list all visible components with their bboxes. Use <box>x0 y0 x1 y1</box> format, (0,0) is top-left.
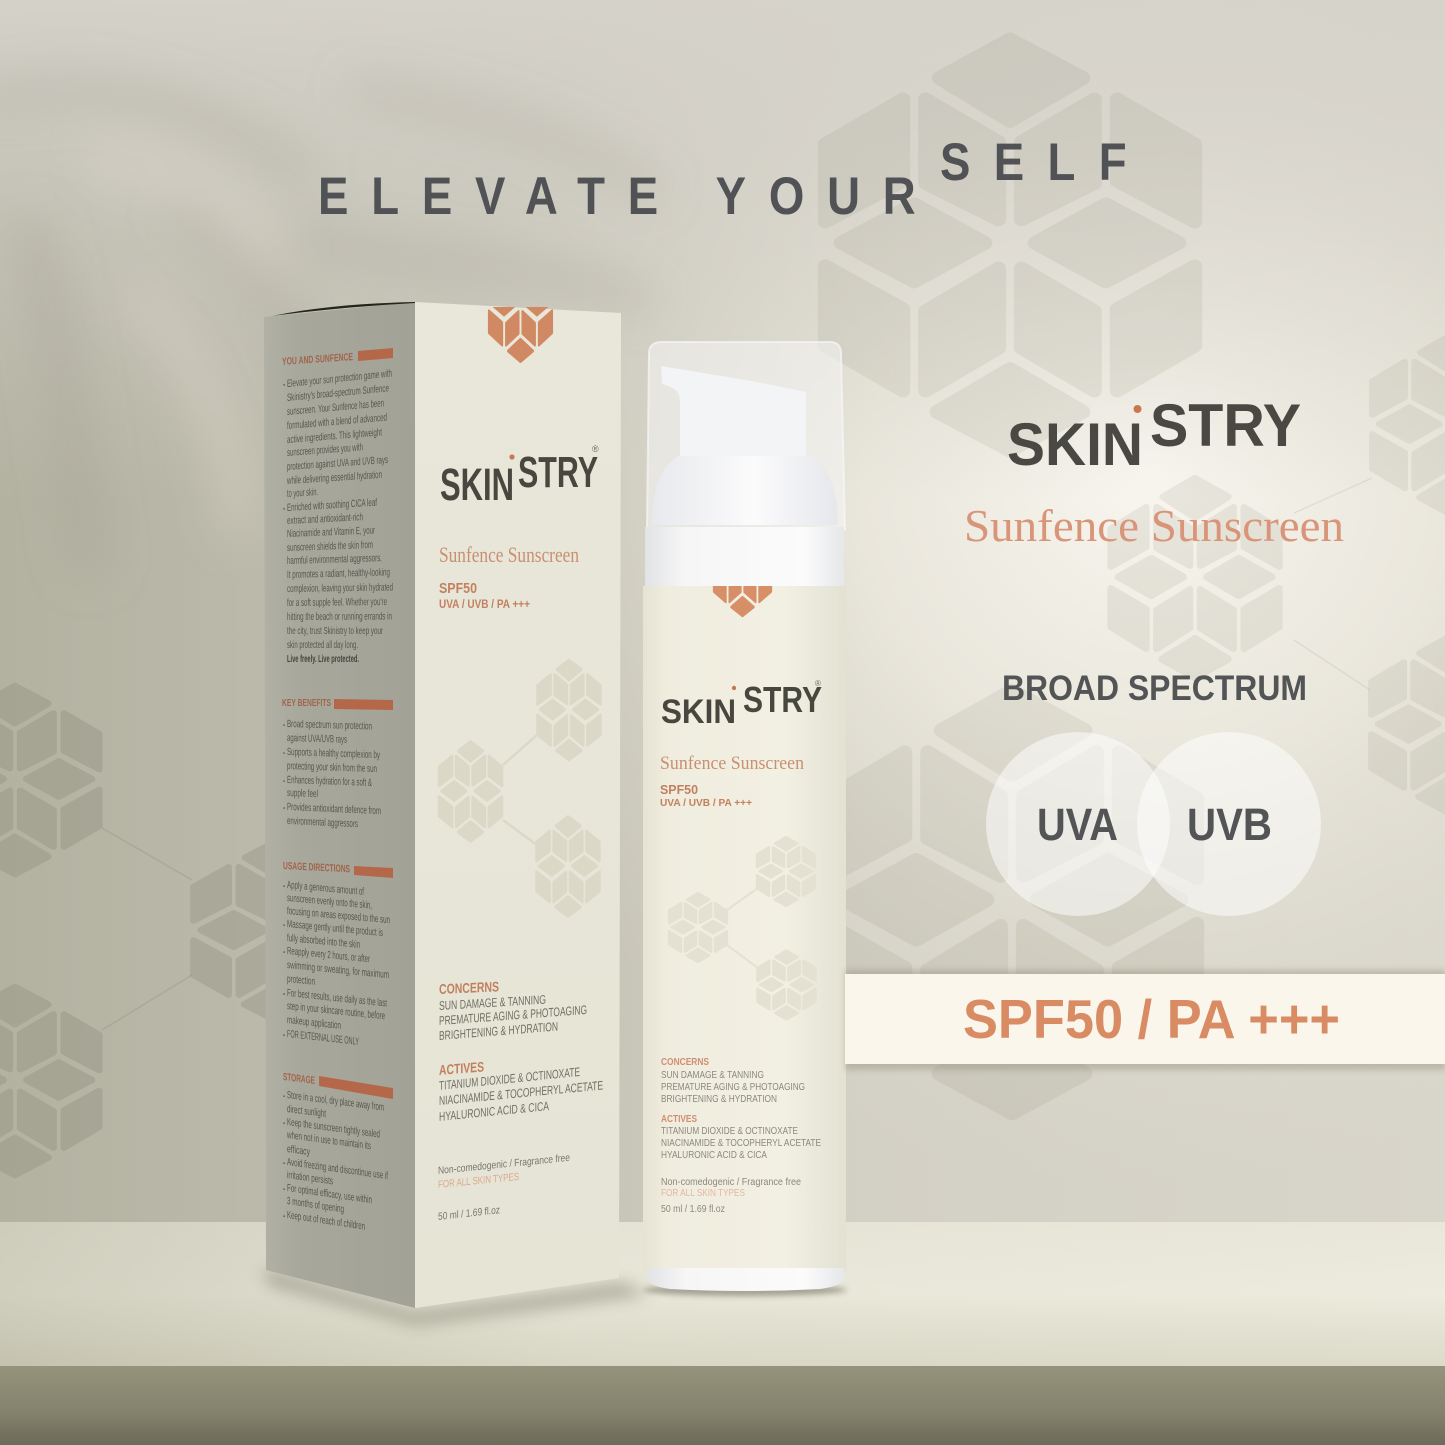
front ledge <box>0 1366 1445 1445</box>
side text: key benefits: Enhances hydration for a soft & <box>287 774 372 789</box>
side text: you and sunfence: for a soft supple feel. Whether you're <box>287 596 387 609</box>
side text: storage: Keep out of reach of children <box>287 1209 365 1233</box>
bottle product name: Sunfence Sunscreen <box>660 753 804 774</box>
circle: UVA: UVA <box>1037 799 1118 850</box>
carton logo: SKIN <box>440 459 514 510</box>
bottle actives text: HYALURONIC ACID & CICA <box>661 1149 767 1161</box>
side text: key benefits: protecting your skin from the sun <box>287 760 377 775</box>
side heading: key benefits <box>282 697 393 710</box>
bottle honeycomb graphic <box>669 837 816 1020</box>
side text: you and sunfence: hitting the beach or running errands in <box>287 610 392 623</box>
bottle actives text: ACTIVES <box>661 1113 697 1125</box>
side text: you and sunfence: sunscreen shields the skin from <box>287 539 373 554</box>
carton product name: Sunfence Sunscreen <box>439 542 579 567</box>
brand logo <box>1007 392 1301 478</box>
circle: UVA <box>986 732 1170 916</box>
carton spf: UVA / UVB / PA +++ <box>439 597 530 611</box>
side text: key benefits: • <box>283 779 285 785</box>
bottle concerns text: BRIGHTENING & HYDRATION <box>661 1093 777 1105</box>
carton spf <box>439 580 530 611</box>
carton concerns text: BRIGHTENING & HYDRATION <box>439 1019 558 1043</box>
side text: usage directions: makeup application <box>287 1014 341 1032</box>
bottle concerns text: PREMATURE AGING & PHOTOAGING <box>661 1081 805 1093</box>
carton skin type note: Non-comedogenic / Fragrance free <box>438 1152 570 1177</box>
carton shadow <box>262 1268 650 1325</box>
bottle logo: STRY <box>743 679 822 720</box>
bottle spf <box>660 782 752 809</box>
side text: you and sunfence: extract and antioxidant-rich <box>287 511 363 527</box>
side text: storage: • <box>283 1187 285 1193</box>
brand logo: SKIN <box>1007 411 1143 478</box>
side text: you and sunfence: to your skin. <box>287 486 318 500</box>
SPF band shadow <box>845 970 1445 1070</box>
carton concerns text <box>439 978 587 1043</box>
side text: you and sunfence: formulated with a blend of advanced <box>287 412 387 432</box>
side text: you and sunfence: Enriched with soothing CICA leaf <box>287 497 377 514</box>
side text: storage: Store in a cool, dry place away from <box>287 1089 384 1114</box>
carton actives text: TITANIUM DIOXIDE & OCTINOXATE <box>439 1065 580 1093</box>
carton front face <box>415 302 621 1308</box>
bottle skin type note <box>661 1177 801 1215</box>
pump nozzle <box>661 366 806 456</box>
side text: storage: 3 months of opening <box>287 1195 344 1216</box>
side text: usage directions <box>283 879 390 1048</box>
bottle actives text: NIACINAMIDE & TOCOPHERYL ACETATE <box>661 1137 821 1149</box>
carton logo: ® <box>592 444 599 454</box>
SPF band: SPF50 / PA +++ <box>963 988 1340 1050</box>
bottle shadow <box>643 1284 847 1296</box>
side text: key benefits: environmental aggressors <box>287 815 358 830</box>
side text: key benefits <box>283 718 381 830</box>
carton actives text: HYALURONIC ACID & CICA <box>439 1099 549 1124</box>
side text: storage: when not in use to maintain its <box>286 1129 371 1152</box>
side text: you and sunfence: the city, trust Skinistry to keep your <box>287 625 383 637</box>
circle: UVB: UVB <box>1187 799 1272 850</box>
side text: usage directions: For best results, use daily as the last <box>287 987 387 1009</box>
side text: you and sunfence: Niacinamide and Vitamin E, your <box>287 524 375 540</box>
side text: usage directions: swimming or sweating, for maximum <box>287 959 389 981</box>
side text: storage: • <box>283 1121 285 1127</box>
side text: storage: • <box>283 1214 285 1220</box>
side text: you and sunfence: harmful environmental aggressors. <box>287 552 382 567</box>
bottle base <box>647 1268 844 1291</box>
side text: usage directions: protection <box>287 973 315 988</box>
transparent cap <box>647 342 845 530</box>
background honeycomb pattern <box>0 40 1445 1175</box>
side text: storage: For optimal efficacy, use within <box>287 1182 372 1206</box>
side text: you and sunfence: • <box>283 507 285 513</box>
bottle spf: SPF50 <box>660 782 698 797</box>
side text: you and sunfence: skin protected all day long. <box>287 639 358 651</box>
side text: you and sunfence: protection against UVA and UVB rays <box>287 454 388 473</box>
UVA UVB venn diagram <box>986 732 1321 916</box>
bottle logo: ® <box>815 679 821 688</box>
side text: you and sunfence <box>283 368 393 665</box>
side text: usage directions: fully absorbed into the skin <box>287 932 360 951</box>
side text: usage directions: FOR EXTERNAL USE ONLY <box>287 1028 359 1048</box>
side text: you and sunfence: sunscreen. Your Sunfence has been <box>287 397 384 418</box>
bottle skin type note: 50 ml / 1.69 fl.oz <box>661 1204 725 1215</box>
side text: you and sunfence: It promotes a radiant, healthy-looking <box>287 566 390 581</box>
headline: ELEVATE YOUR SELF <box>318 133 1127 226</box>
side text: key benefits: • <box>283 806 285 812</box>
carton actives text: NIACINAMIDE & TOCOPHERYL ACETATE <box>439 1078 603 1108</box>
side heading: storage <box>283 1071 393 1099</box>
icon: carton orange honeycomb logo <box>488 307 554 363</box>
side text: storage: • <box>283 1161 285 1167</box>
carton concerns text: SUN DAMAGE & TANNING <box>439 993 546 1013</box>
headline: ELEVATE YOUR SELF: SELF <box>940 133 1127 192</box>
side text: storage <box>283 1089 388 1233</box>
SPF band <box>845 974 1445 1064</box>
collar <box>645 527 844 589</box>
icon: bottle orange honeycomb logo <box>712 586 772 618</box>
side text: you and sunfence: • <box>283 383 285 389</box>
bottle spf: UVA / UVB / PA +++ <box>660 798 752 809</box>
side text: you and sunfence: active ingredients. This lightweight <box>287 426 382 446</box>
side text: you and sunfence: sunscreen provides you with <box>287 441 363 459</box>
bottle concerns text <box>661 1056 805 1105</box>
side text: storage: irritation persists <box>287 1169 333 1187</box>
side text: key benefits: Broad spectrum sun protection <box>287 718 372 733</box>
carton actives text: ACTIVES <box>439 1058 484 1078</box>
floor surface <box>0 1222 1445 1366</box>
carton skin type note: FOR ALL SKIN TYPES <box>438 1171 519 1191</box>
carton concerns text: PREMATURE AGING & PHOTOAGING <box>439 1003 587 1028</box>
side text: you and sunfence: Elevate your sun protection game with <box>287 368 392 390</box>
side text: usage directions: • <box>283 923 285 929</box>
side text: you and sunfence: complexion, leaving your skin hydrated <box>287 581 393 595</box>
bottle actives text: TITANIUM DIOXIDE & OCTINOXATE <box>661 1125 798 1137</box>
side text: usage directions: focusing on areas exposed to the sun <box>287 905 390 926</box>
side text: usage directions: • <box>283 992 285 998</box>
side text: usage directions: step in your skincare routine, before <box>287 1000 385 1022</box>
side text: you and sunfence: Live freely. Live protected. <box>287 653 359 665</box>
side heading: usage directions: USAGE DIRECTIONS <box>283 860 350 875</box>
side heading: key benefits: KEY BENEFITS <box>282 697 331 709</box>
carton actives text <box>439 1058 603 1124</box>
side text: usage directions: Reapply every 2 hours, or after <box>287 945 370 965</box>
headline: ELEVATE YOUR SELF: ELEVATE YOUR <box>318 167 916 226</box>
bottle logo <box>661 679 822 731</box>
circle: UVB <box>1137 732 1321 916</box>
side text: key benefits: Supports a healthy complexion by <box>287 746 380 761</box>
bottle label <box>643 586 846 1272</box>
side text: storage: • <box>283 1094 285 1100</box>
sunscreen bottle <box>643 342 846 1291</box>
carton logo: STRY <box>518 448 598 497</box>
side text: storage: Keep the sunscreen tightly sealed <box>287 1116 380 1141</box>
carton side face <box>264 302 415 1308</box>
side text: storage: Avoid freezing and discontinue use if <box>287 1156 388 1182</box>
side text: key benefits: supple feel <box>287 787 318 800</box>
side heading: you and sunfence: YOU AND SUNFENCE <box>282 351 353 368</box>
carton skin type note: 50 ml / 1.69 fl.oz <box>438 1204 500 1223</box>
carton honeycomb graphic <box>439 660 601 916</box>
side text: usage directions: • <box>283 884 285 890</box>
pump dome <box>652 455 838 525</box>
bottle skin type note: Non-comedogenic / Fragrance free <box>661 1177 801 1188</box>
side text: usage directions: Apply a generous amount of <box>287 879 364 898</box>
side text: you and sunfence: while delivering essential hydration <box>286 469 382 487</box>
side heading: storage: STORAGE <box>283 1071 315 1087</box>
side text: usage directions: • <box>283 950 285 956</box>
bottle concerns text: SUN DAMAGE & TANNING <box>661 1069 764 1081</box>
side text: storage: direct sunlight <box>287 1103 326 1120</box>
bottle skin type note: FOR ALL SKIN TYPES <box>661 1188 745 1199</box>
side text: key benefits: • <box>283 723 285 729</box>
broad spectrum heading: BROAD SPECTRUM <box>1002 669 1307 708</box>
bottle logo: SKIN <box>661 693 736 731</box>
bottle concerns text: CONCERNS <box>661 1056 709 1068</box>
side text: key benefits: against UVA/UVB rays <box>287 732 347 746</box>
side text: key benefits: • <box>283 751 285 757</box>
brand logo: STRY <box>1150 392 1301 459</box>
carton concerns text: CONCERNS <box>439 978 499 997</box>
side text: key benefits: Provides antioxidant defence from <box>287 801 381 817</box>
product name: Sunfence Sunscreen <box>964 501 1344 551</box>
side text: usage directions: sunscreen evenly onto the skin, <box>287 892 372 912</box>
side text: you and sunfence: Skinistry's broad-spectrum Sunfence <box>287 382 389 404</box>
carton logo <box>440 444 599 510</box>
carton skin type note <box>438 1152 570 1223</box>
side text: storage: efficacy <box>287 1143 310 1158</box>
side text: usage directions: • <box>283 1033 285 1039</box>
carton top edge <box>272 302 415 316</box>
bottle actives text <box>661 1113 821 1161</box>
side text: usage directions: Massage gently until the product is <box>287 918 383 939</box>
product carton <box>264 248 621 1308</box>
carton spf: SPF50 <box>439 580 477 597</box>
